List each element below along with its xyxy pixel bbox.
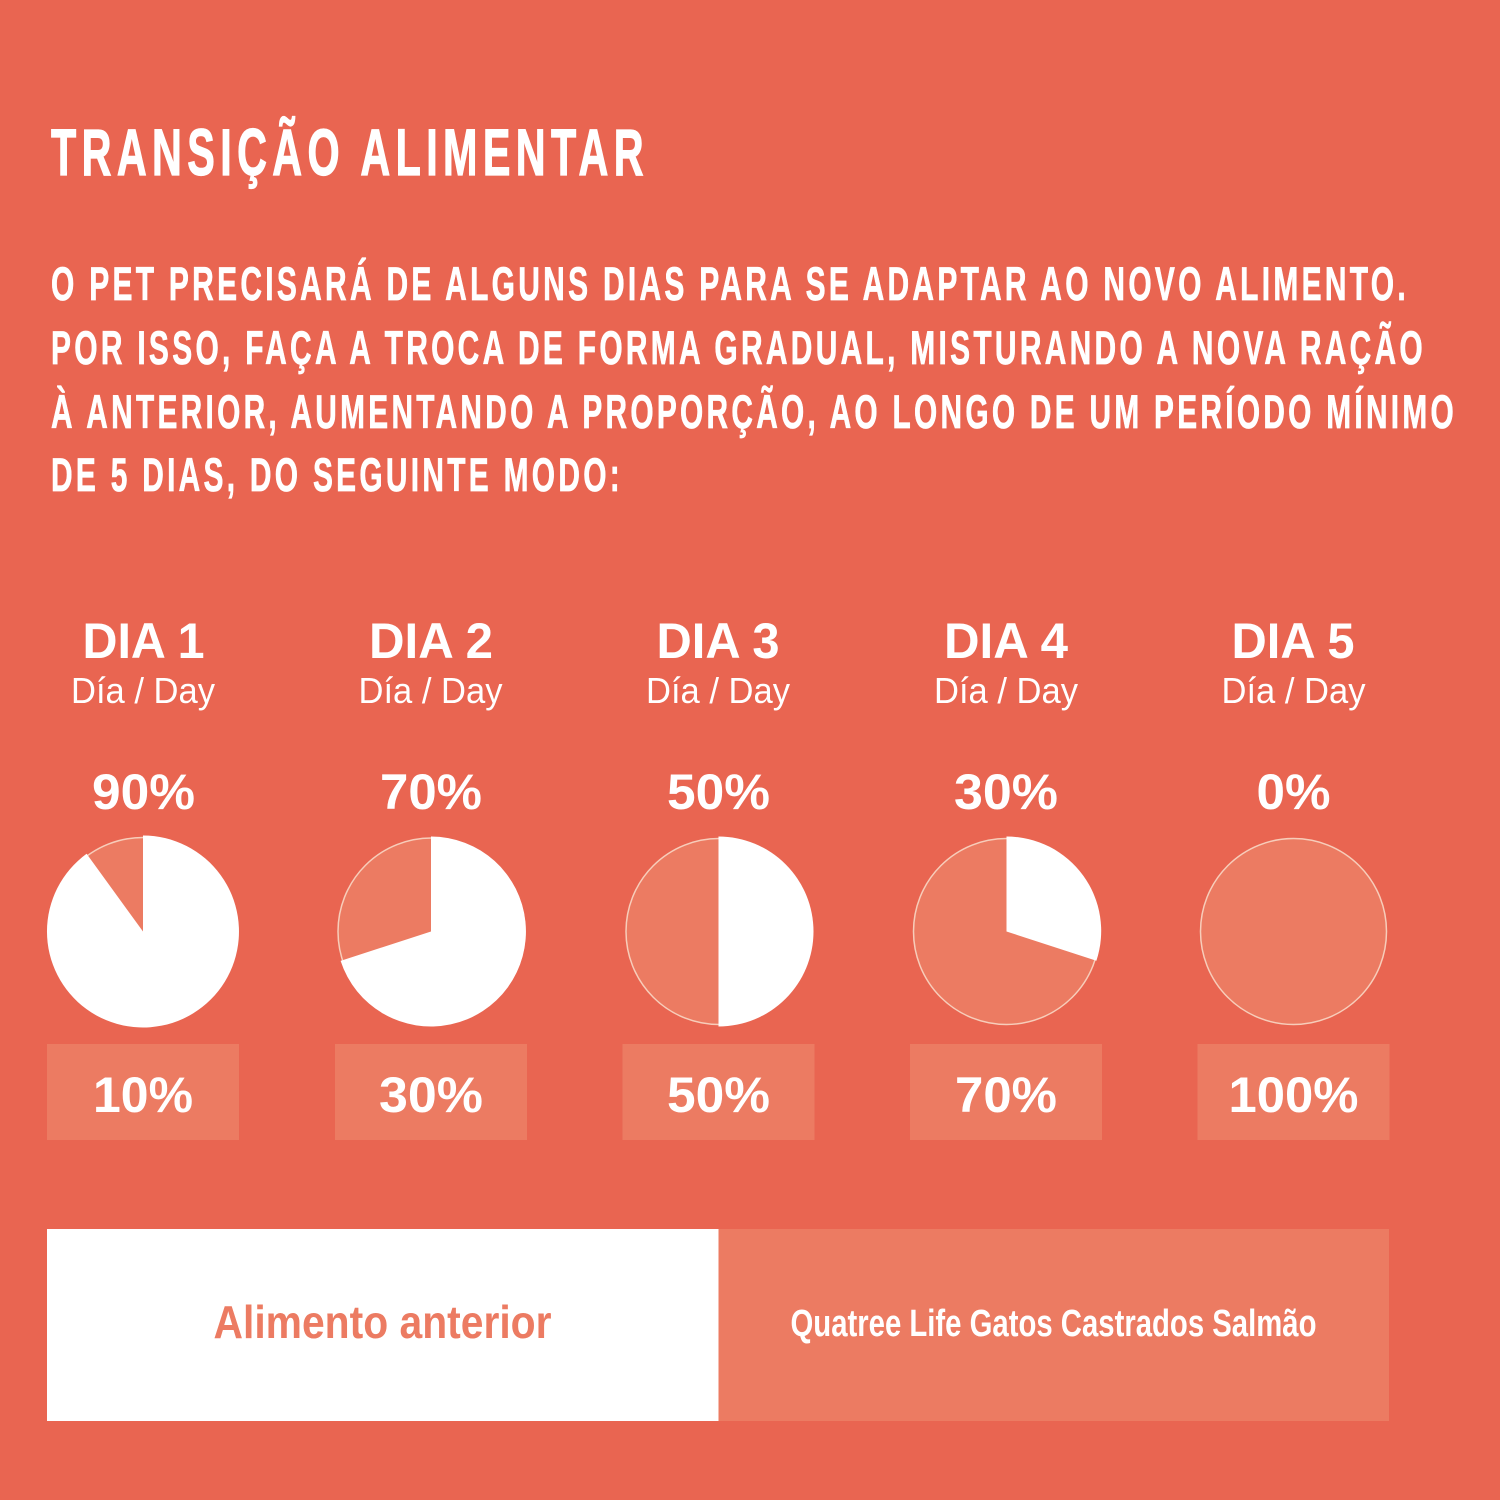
panel: day 3 [622,613,814,1140]
day 5 heading: DIA 5 [1232,613,1354,669]
day 1 subtitle: Día / Day [71,670,215,711]
day 4 heading: DIA 4 [944,613,1068,669]
day 3 new food percent [622,1044,814,1140]
day 4 new food percent [910,1044,1102,1140]
day 3 heading: DIA 3 [656,613,780,669]
day 3 subtitle: Día / Day [646,670,790,711]
day 4 subtitle: Día / Day [934,670,1078,711]
day 2 previous food percent: 70% [380,764,482,820]
panel: day 5 [1198,613,1390,1140]
legend: new food [718,1229,1389,1421]
legend: previous food: Alimento anterior [214,1296,552,1348]
legend: new food: Quatree Life Gatos Castrados Salmão [790,1303,1316,1345]
day 4 new food percent: 70% [955,1067,1057,1123]
intro text block: DE 5 DIAS, DO SEGUINTE MODO: [51,448,623,501]
day 4 previous food percent: 30% [954,764,1058,820]
day 5 pie chart [1200,838,1386,1024]
day 2 pie chart [338,836,526,1026]
day 5 previous food percent: 0% [1256,764,1330,820]
day 3 previous food percent: 50% [667,764,770,820]
day 1 previous food percent: 90% [92,764,195,820]
day 1 heading: DIA 1 [82,613,204,669]
day 5 new food percent: 100% [1228,1067,1358,1123]
day 4 pie chart [914,836,1101,1024]
panel: day 4 [910,613,1102,1140]
day 1 new food percent: 10% [93,1067,193,1123]
day 1 pie chart [47,836,239,1027]
panel: day 2 [335,613,527,1140]
title: TRANSIÇÃO ALIMENTAR [51,115,649,189]
intro text block [51,257,1457,501]
day 2 subtitle: Día / Day [358,670,502,711]
legend: previous food [47,1229,718,1421]
day 1 new food percent [47,1044,239,1140]
day 5 subtitle: Día / Day [1222,670,1366,711]
day 2 heading: DIA 2 [369,613,493,669]
day 3 pie chart [626,836,814,1026]
day 3 new food percent: 50% [667,1067,770,1123]
panel: day 1 [47,613,239,1140]
day 5 new food percent [1198,1044,1390,1140]
day 2 new food percent [335,1044,527,1140]
day 2 new food percent: 30% [379,1067,483,1123]
